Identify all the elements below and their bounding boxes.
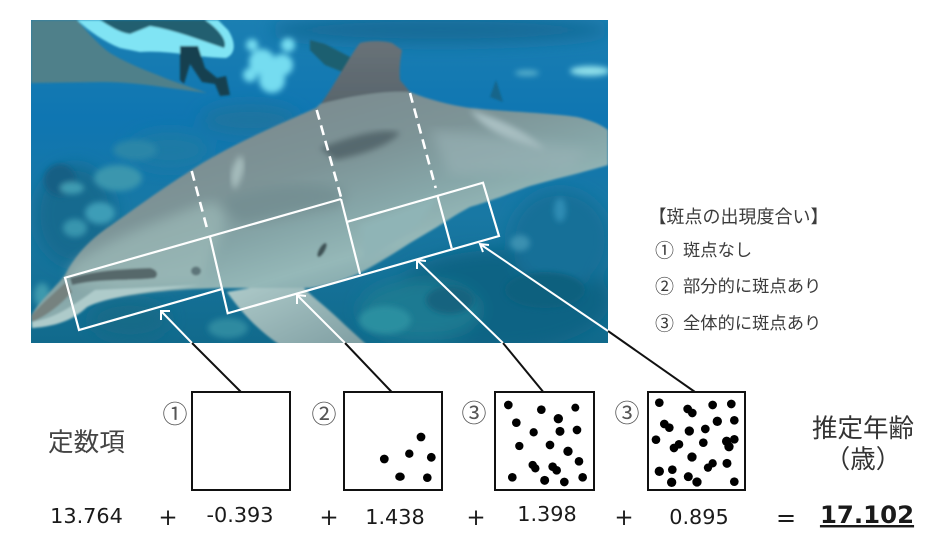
circled number 1: ① [162,395,188,431]
equation row: 1.398 [517,502,577,526]
dolphin photograph [31,16,610,350]
equation row [50,500,914,532]
equation row: -0.393 [206,503,274,527]
equation row: 0.895 [669,505,729,529]
panel: spot box 4 [648,392,745,490]
equation row: = [776,504,796,532]
panel: spot box 1 [192,392,290,490]
main dolphin [31,41,608,345]
legend: spot appearance levels: 斑点なし [683,240,752,260]
panel: spot box 3 [495,392,594,490]
legend: spot appearance levels: ③ [655,313,674,335]
equation row: 1.438 [365,505,425,529]
equation row: + [466,505,486,531]
circled number 3: ③ [461,394,487,430]
label: constant term: 定数項 [48,428,125,457]
legend: spot appearance levels: 全体的に斑点あり [683,313,821,333]
white measurement grid [65,93,499,330]
arrow: region 2 [297,295,392,392]
label: estimated age [812,415,914,474]
label: estimated age: （歳） [825,446,901,474]
background dolphin and divers [31,20,503,102]
equation row: + [319,505,339,531]
arrow: region 1 [161,311,241,392]
panel: spot box 2 [344,392,442,490]
equation row: + [614,505,634,531]
legend: spot appearance levels: 【斑点の出現度合い】 [648,207,828,227]
arrow: region 4 [480,244,695,392]
legend: spot appearance levels [648,207,828,335]
arrow: region 3 [417,260,543,392]
legend: spot appearance levels: ② [655,276,674,298]
equation row: + [158,505,178,531]
equation row: 17.102 [820,500,914,529]
legend: spot appearance levels: ① [655,240,674,262]
circled number 2: ② [311,395,337,431]
legend: spot appearance levels: 部分的に斑点あり [683,276,821,296]
label: estimated age: 推定年齢 [812,415,914,443]
equation row: 13.764 [50,504,123,528]
circled number 3 (second): ③ [614,394,640,430]
